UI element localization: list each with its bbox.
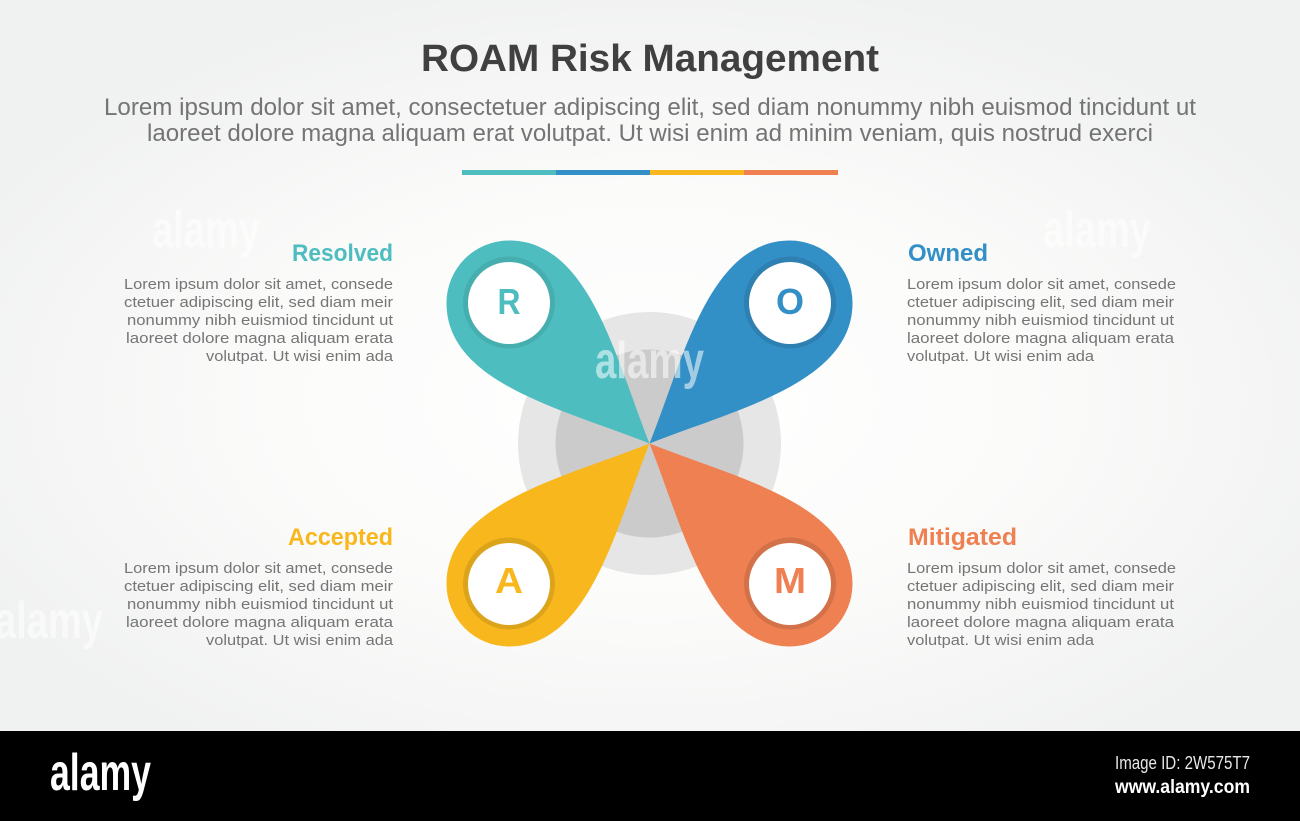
footer logo: alamy — [50, 744, 151, 802]
petal: resolved — [446, 240, 650, 444]
subtitle text: Lorem ipsum dolor sit amet, consectetuer adipiscing elit, sed diam nonummy nibh euismod tincidunt ut — [104, 94, 1196, 121]
text block: owned: Lorem ipsum dolor sit amet, consede — [907, 276, 1176, 293]
text block: resolved: laoreet dolore magna aliquam erata — [126, 330, 394, 347]
text block: mitigated: ctetuer adipiscing elit, sed diam meir — [907, 578, 1174, 595]
text block: mitigated: volutpat. Ut wisi enim ada — [907, 632, 1095, 649]
central concentric circles — [518, 312, 781, 575]
text block: mitigated: Lorem ipsum dolor sit amet, consede — [907, 560, 1176, 577]
text block: accepted: Lorem ipsum dolor sit amet, consede — [124, 560, 393, 577]
text block: resolved: volutpat. Ut wisi enim ada — [206, 348, 394, 365]
text block: resolved: ctetuer adipiscing elit, sed diam meir — [124, 294, 393, 311]
text block: resolved — [124, 240, 394, 365]
text block: owned: volutpat. Ut wisi enim ada — [907, 348, 1095, 365]
footer image id: Image ID: 2W575T7 — [1115, 753, 1250, 773]
text block: owned — [907, 240, 1176, 365]
text block: accepted — [124, 524, 394, 649]
text block: accepted: ctetuer adipiscing elit, sed diam meir — [124, 578, 393, 595]
text block: resolved: Lorem ipsum dolor sit amet, consede — [124, 276, 393, 293]
text block: mitigated: Mitigated — [908, 524, 1017, 551]
text block: owned: laoreet dolore magna aliquam erata — [907, 330, 1175, 347]
watermarks — [0, 201, 1151, 650]
subtitle text — [104, 94, 1196, 147]
text block: accepted: Accepted — [288, 524, 393, 551]
text block: mitigated: nonummy nibh euismiod tincidunt ut — [907, 596, 1175, 613]
petal: accepted — [446, 444, 650, 646]
text block: resolved: nonummy nibh euismiod tincidunt ut — [127, 312, 394, 329]
subtitle text: laoreet dolore magna aliquam erat volutpat. Ut wisi enim ad minim veniam, quis nostrud exerci — [147, 120, 1153, 147]
watermarks: alamy — [595, 332, 704, 390]
footer image id — [1114, 753, 1250, 798]
petal: owned — [650, 240, 852, 444]
watermarks: alamy — [152, 201, 260, 259]
petal: resolved: R — [498, 281, 520, 322]
watermarks: alamy — [1043, 201, 1151, 259]
text block: mitigated — [907, 524, 1176, 649]
text block: resolved: Resolved — [292, 240, 393, 267]
colour divider bar — [462, 170, 838, 175]
text block: accepted: volutpat. Ut wisi enim ada — [206, 632, 394, 649]
petal: owned: O — [776, 281, 804, 322]
text block: owned: nonummy nibh euismiod tincidunt ut — [907, 312, 1175, 329]
petal: mitigated: M — [774, 560, 806, 601]
text block: owned: ctetuer adipiscing elit, sed diam meir — [907, 294, 1174, 311]
footer band — [0, 731, 1300, 821]
text block: owned: Owned — [908, 240, 988, 267]
text block: accepted: nonummy nibh euismiod tincidunt ut — [127, 596, 394, 613]
footer image id: www.alamy.com — [1114, 777, 1250, 798]
petal: mitigated — [650, 444, 852, 646]
petal: accepted: A — [495, 560, 523, 601]
title: ROAM Risk Management — [421, 38, 879, 80]
text block: accepted: laoreet dolore magna aliquam erata — [126, 614, 394, 631]
text block: mitigated: laoreet dolore magna aliquam erata — [907, 614, 1175, 631]
